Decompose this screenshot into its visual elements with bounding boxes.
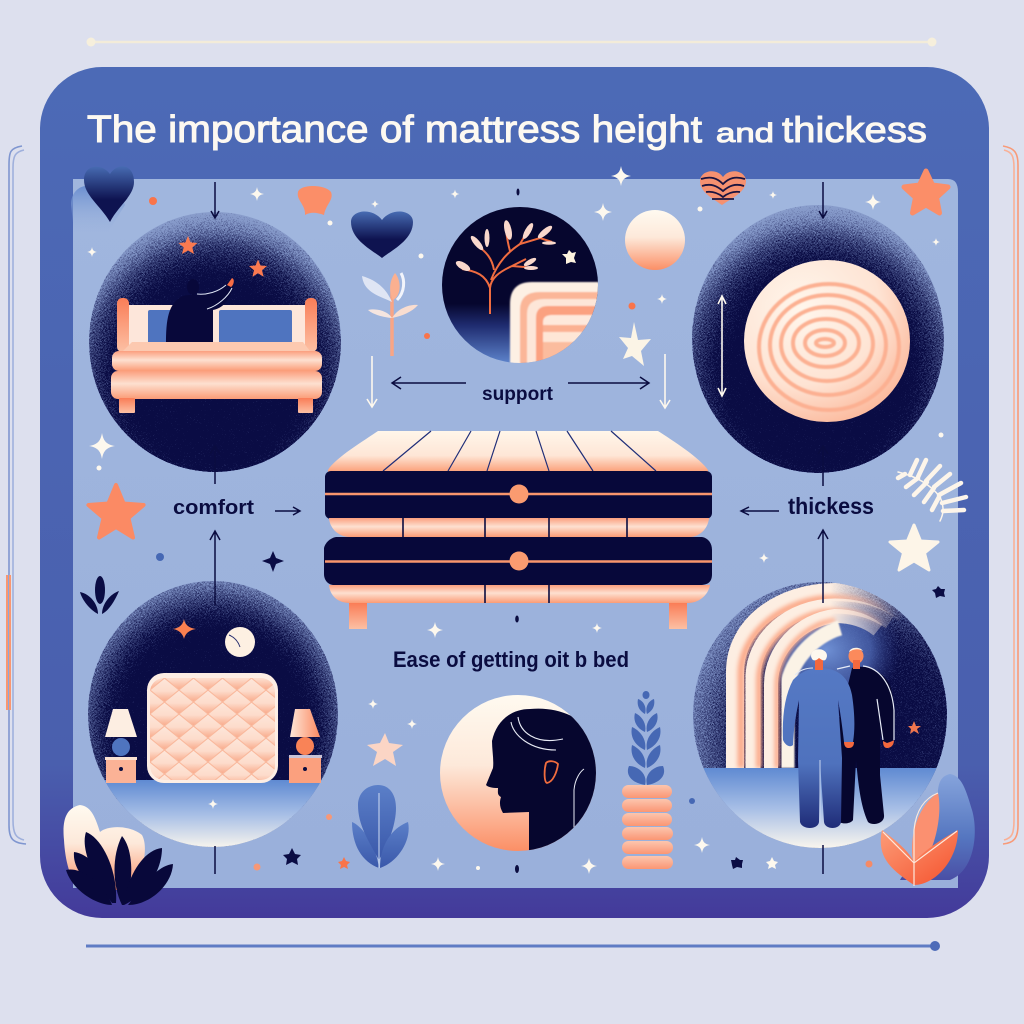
icon: peach star [367, 733, 403, 766]
left side rule [7, 146, 26, 844]
icon: top-right orange star [904, 171, 948, 213]
top pad [328, 431, 708, 472]
icon: left orange star [88, 485, 144, 538]
circle: comfort bed scene [89, 212, 341, 472]
arches [735, 592, 905, 768]
arrow: bottom stem left [214, 846, 216, 874]
foam disc [744, 260, 910, 422]
title: and [716, 118, 774, 148]
title [87, 109, 927, 151]
middle peach strip [329, 518, 709, 537]
arrow: bottom stem right [822, 845, 824, 874]
arrow: top-right down [819, 182, 827, 218]
stars in circle [178, 236, 267, 277]
circle: head profile [440, 695, 596, 851]
label: comfort: comfort [173, 497, 254, 519]
icon: right cream star [890, 525, 938, 570]
orange four-point star [173, 619, 196, 639]
floor [104, 780, 322, 847]
icon: center-right cream star [619, 322, 651, 366]
small cream sparkles [87, 166, 944, 874]
arrows [210, 182, 828, 874]
icon: striped heart [700, 171, 746, 205]
icon: blob top [298, 186, 332, 215]
floor [704, 768, 936, 848]
dark figure [835, 648, 895, 824]
right side rule [1003, 146, 1018, 844]
head silhouette [486, 708, 596, 850]
bed headboard and posts [117, 298, 317, 352]
small dark ticks [515, 188, 520, 873]
cream down arrows [367, 354, 670, 408]
icon: white fern [898, 460, 966, 521]
icon: orange leaf [881, 793, 958, 886]
tree buds [454, 219, 576, 273]
label: support: support [482, 384, 554, 405]
icon: bottom-left plant [64, 805, 173, 905]
circle: couple and arches [690, 582, 950, 850]
tree branches [462, 230, 552, 314]
arrow: support left [392, 377, 466, 389]
quilted mattress [147, 673, 278, 783]
icon: blue leaf plant [352, 785, 409, 868]
bottom peach strip [329, 585, 710, 603]
icon: blue pear blob [900, 774, 975, 880]
bed mattress and base [111, 342, 322, 413]
small orange star [908, 721, 921, 734]
arrow: comfort right [275, 507, 300, 515]
blue figure [783, 649, 854, 828]
bottom decorative rule [86, 941, 940, 951]
circle: quilted mattress bedroom [85, 581, 341, 850]
inner panel [73, 179, 958, 888]
icon: top-left dark heart [84, 166, 134, 222]
mattress legs [349, 603, 687, 629]
double-headed arrow [718, 296, 726, 396]
icon: gradient sun [625, 210, 685, 270]
central mattress [324, 431, 712, 629]
person silhouette reaching up [166, 278, 234, 344]
title: thickess [782, 109, 927, 150]
upper dark band [325, 471, 712, 519]
arrow: thickess left [741, 507, 779, 515]
icon: middle dark heart [351, 212, 413, 258]
icon: dark leaf sprig [80, 576, 119, 614]
right lamp and table [289, 709, 322, 783]
lower dark band [324, 537, 712, 585]
arrow: support right [568, 377, 649, 389]
label: ease of getting out of bed: Ease of getting oit b bed [393, 647, 629, 672]
icon: plant sprout [362, 273, 418, 356]
arrow: thickess up [818, 446, 828, 486]
arrow: thickess up lower [818, 530, 828, 603]
mattress corner layers [510, 282, 603, 370]
arrow: top-left down [211, 182, 219, 218]
main frame [40, 67, 989, 918]
title: The importance of mattress height [87, 109, 702, 151]
top decorative rule [86, 38, 936, 46]
label: thickess: thickess [788, 493, 874, 519]
small orange and dark dots [149, 197, 945, 870]
moon [225, 627, 255, 657]
circle: tree and mattress corner [442, 207, 603, 370]
arrow: comfort up [210, 446, 220, 484]
circle: foam disc thickness [692, 205, 944, 473]
icon: stacked peach stones with plant [622, 691, 673, 869]
icon: top-left blue cloud [71, 186, 125, 232]
left lamp and table [105, 709, 137, 783]
arrow: comfort up lower [210, 531, 220, 606]
blue glow behind couple [751, 588, 901, 712]
